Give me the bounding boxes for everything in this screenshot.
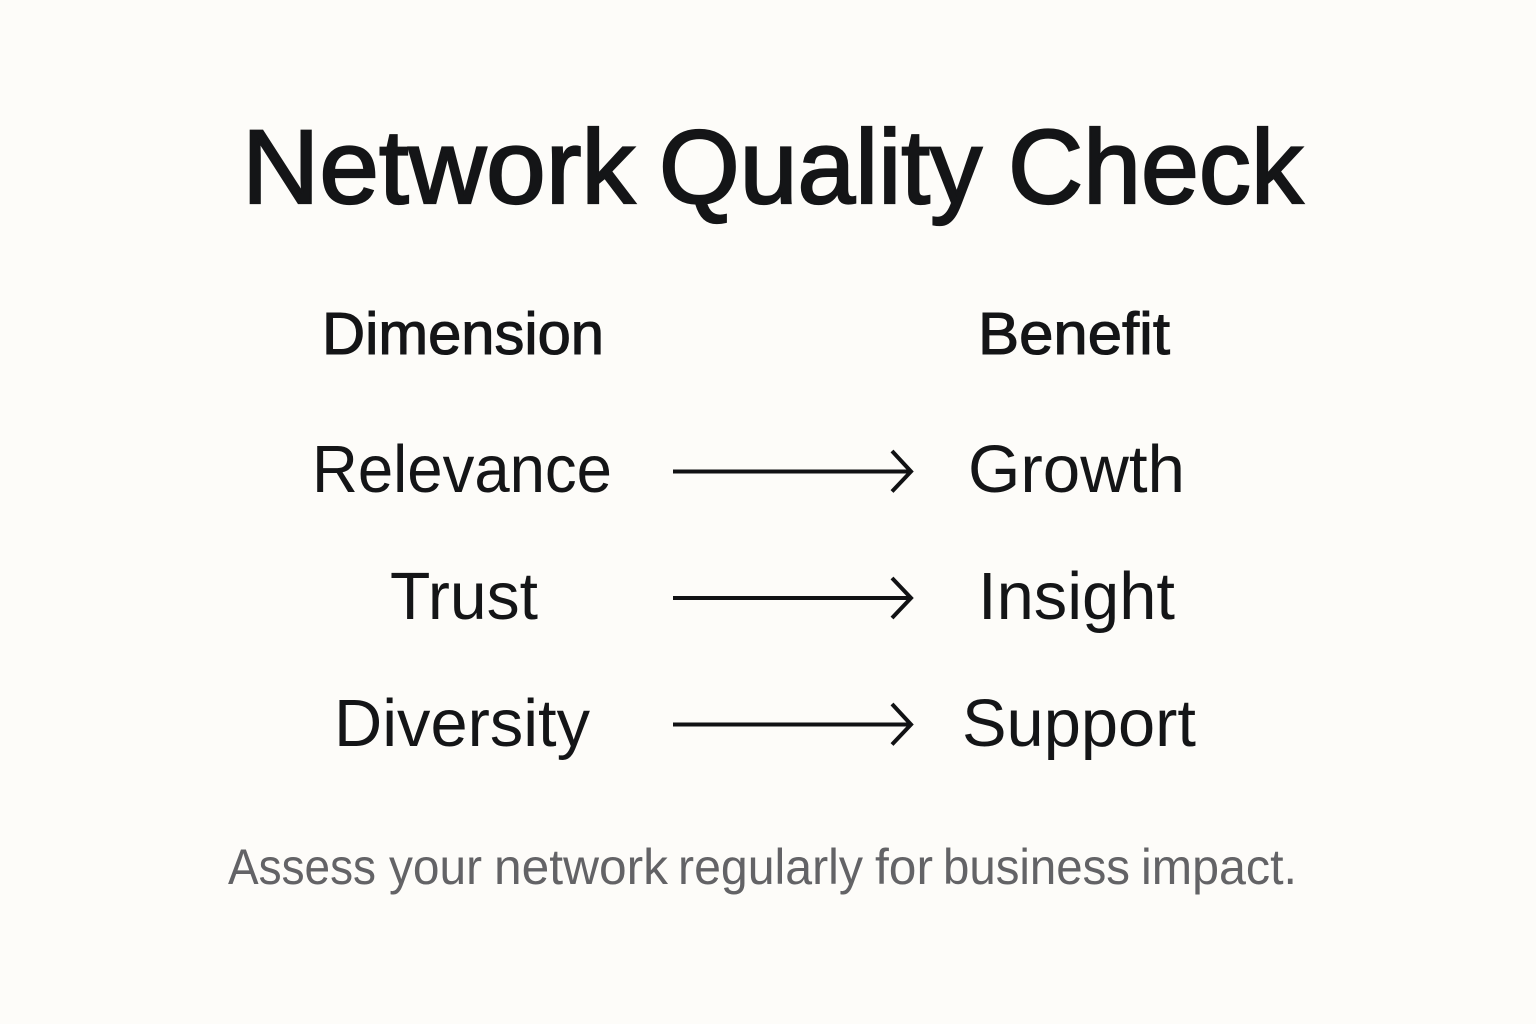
- footer note: Assess: [228, 839, 376, 895]
- row 1: Relevance to Growth: [312, 432, 1185, 507]
- dimension: Relevance: Relevance: [312, 432, 612, 507]
- footer note: business: [943, 839, 1130, 895]
- dimension: Diversity: Diversity: [334, 686, 590, 761]
- footer note: [228, 839, 1297, 895]
- benefit: Growth: Growth: [968, 432, 1185, 507]
- column heading: Benefit: Benefit: [978, 301, 1170, 367]
- dimension: Trust: Trust: [390, 559, 538, 634]
- benefit: Support: Support: [962, 686, 1196, 761]
- column heading: Dimension: Dimension: [322, 301, 604, 367]
- title: Check: [1008, 109, 1303, 226]
- row 2: Trust to Insight: [390, 559, 1175, 634]
- arrow 2: [673, 578, 911, 618]
- footer note: impact.: [1141, 839, 1297, 895]
- title: [242, 109, 1303, 226]
- footer note: for: [875, 839, 933, 895]
- footer note: your: [389, 839, 482, 895]
- footer note: network: [494, 839, 669, 895]
- title: Network: [242, 109, 636, 226]
- arrow 3: [673, 704, 911, 744]
- arrow 1: [673, 451, 911, 492]
- row 3: Diversity to Support: [334, 686, 1196, 761]
- footer note: regularly: [678, 839, 863, 895]
- benefit: Insight: Insight: [978, 559, 1175, 634]
- title: Quality: [659, 109, 982, 226]
